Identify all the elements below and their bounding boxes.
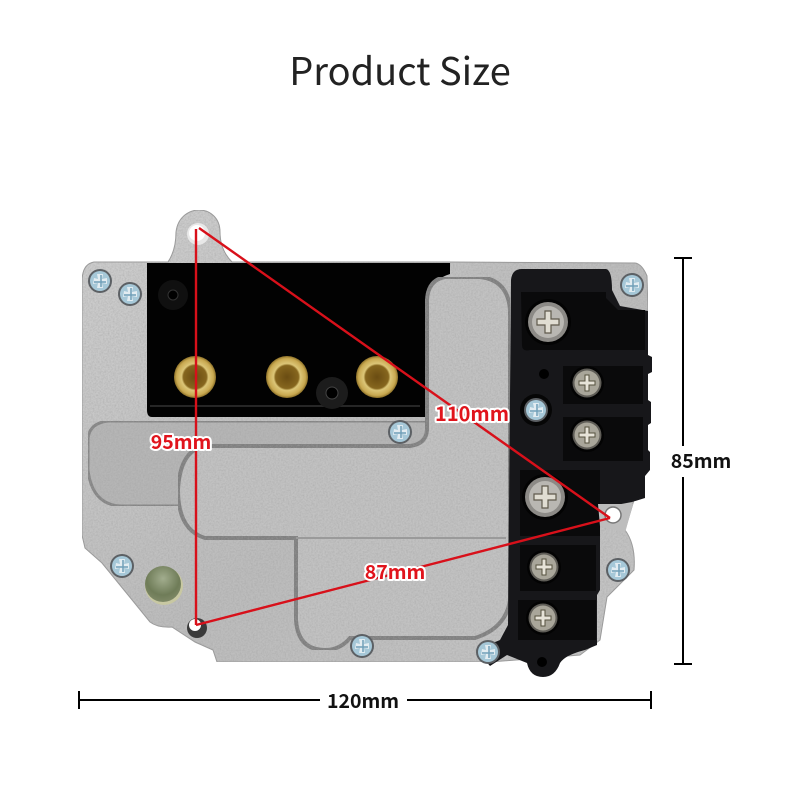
groove between raised sections bbox=[296, 537, 506, 539]
aluminium housing bbox=[82, 210, 648, 662]
mounting holes bbox=[187, 223, 633, 638]
indicator LED bbox=[145, 566, 183, 605]
width dimension line bbox=[79, 691, 651, 709]
label: 110mm: 110mm bbox=[435, 398, 509, 427]
terminal block bbox=[476, 269, 652, 677]
plastic posts bbox=[158, 280, 348, 409]
raised L section bbox=[178, 277, 510, 650]
black connector housing bbox=[147, 263, 450, 417]
raised left ridge bbox=[88, 421, 430, 506]
red measurement triangle bbox=[196, 228, 610, 625]
label: 95mm: 95mm bbox=[151, 426, 211, 455]
terminal screws bbox=[522, 299, 604, 635]
screw pockets bbox=[518, 292, 645, 640]
label: 120mm: 120mm bbox=[327, 685, 399, 714]
height dimension line bbox=[674, 258, 692, 664]
housing screws bbox=[88, 269, 644, 664]
product photo: controller unit bbox=[82, 210, 652, 677]
title: Product Size bbox=[289, 41, 511, 96]
label: 85mm: 85mm bbox=[671, 445, 731, 474]
label: 87mm: 87mm bbox=[365, 556, 425, 585]
brass inserts bbox=[174, 356, 398, 398]
